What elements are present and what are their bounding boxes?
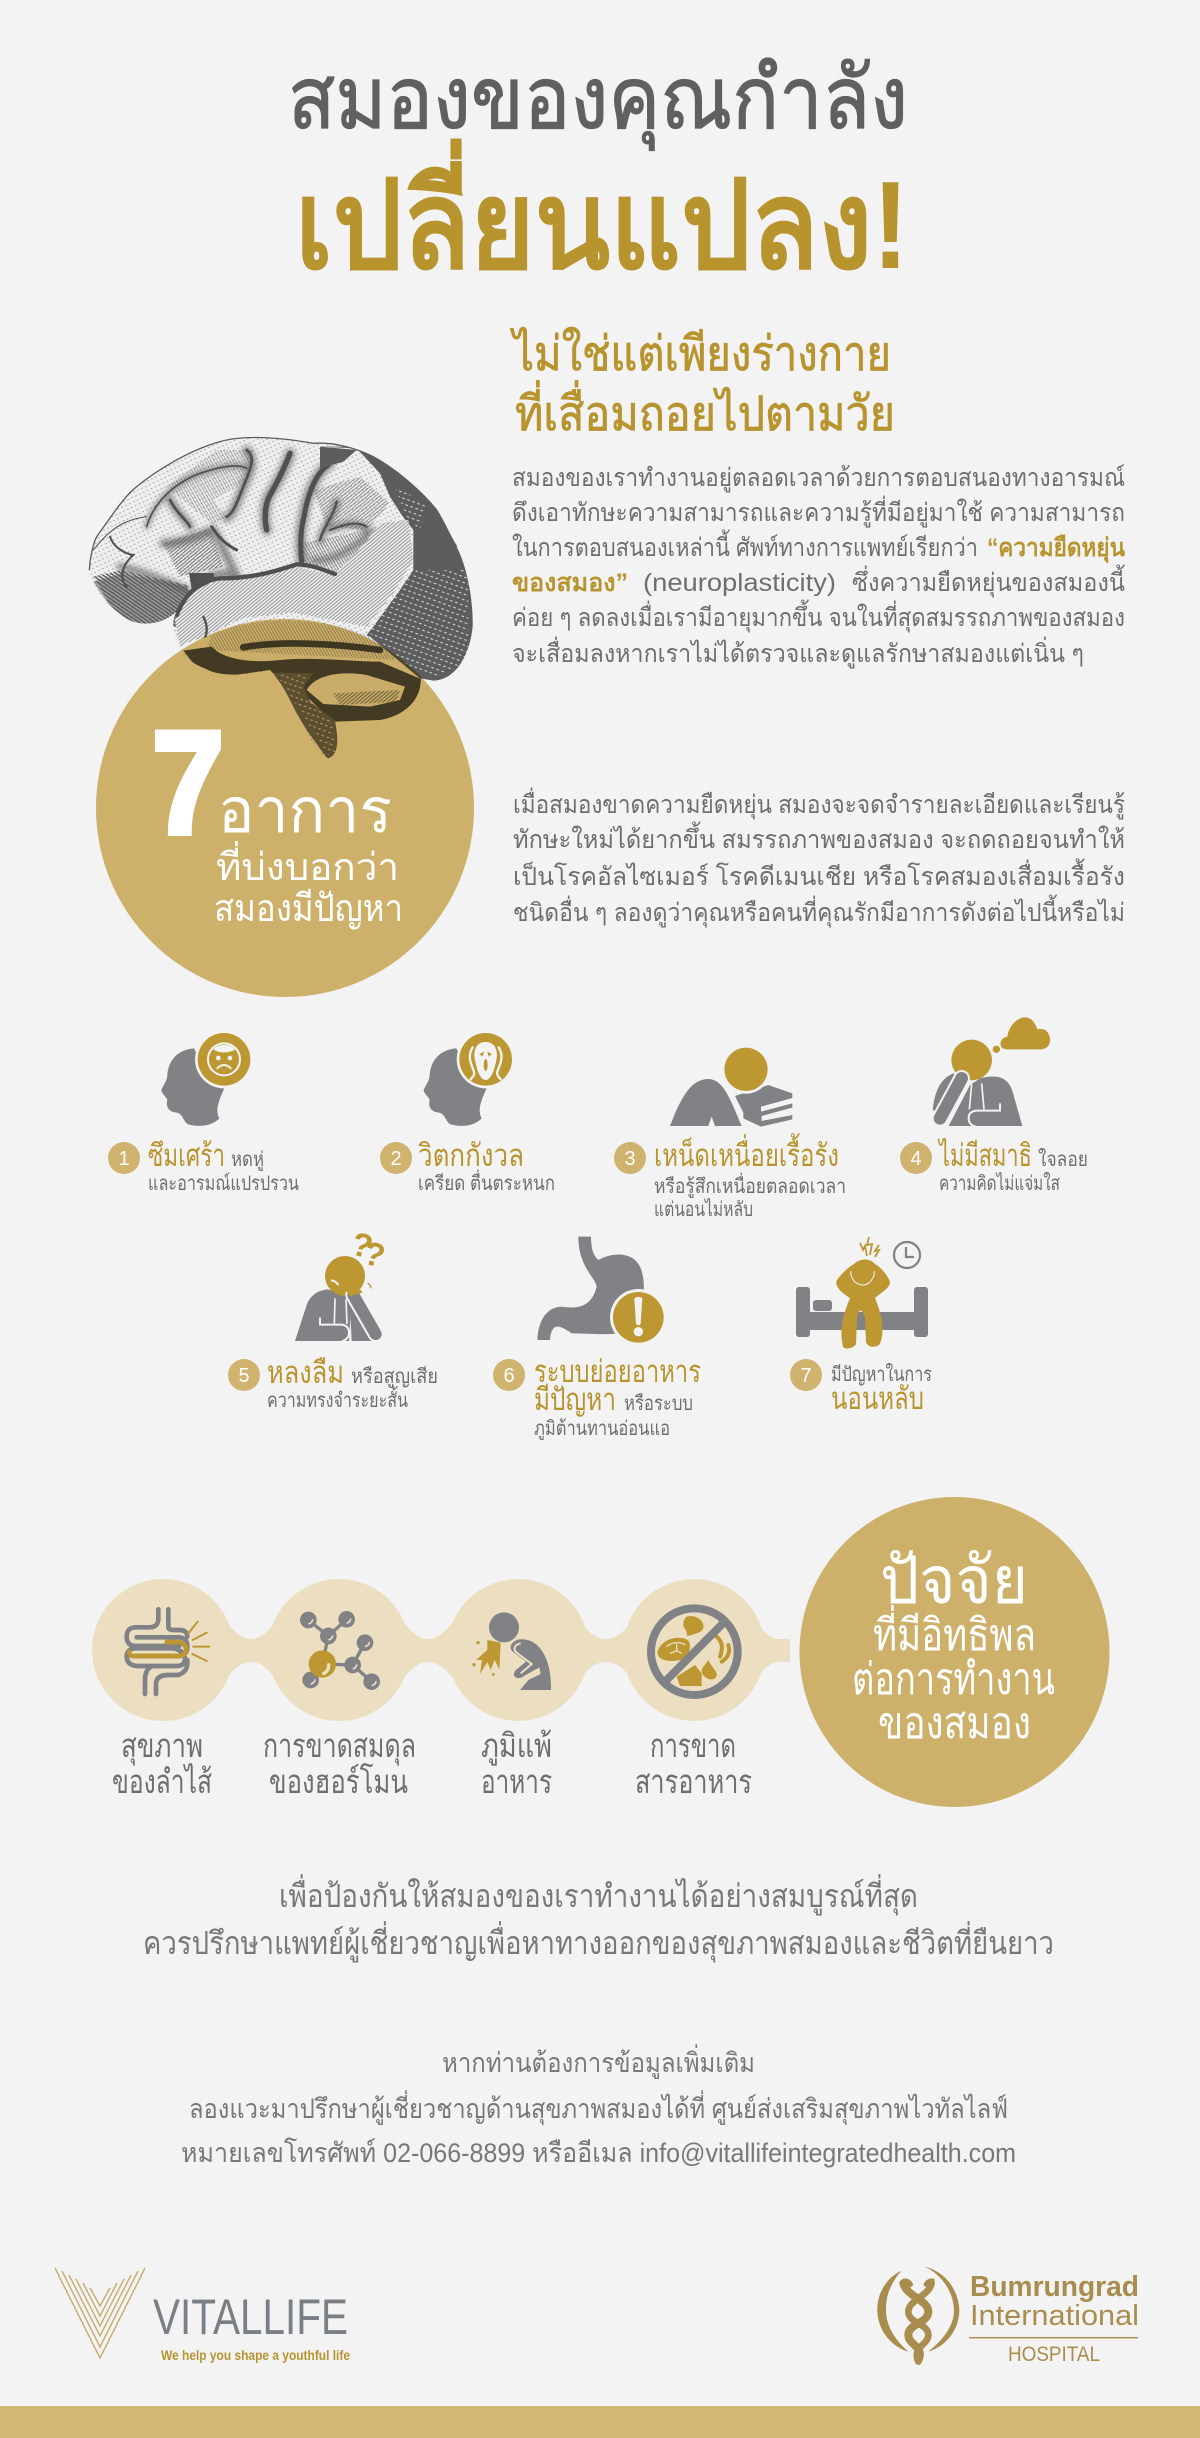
temporal underside and cerebellum (180, 621, 423, 760)
title (288, 51, 909, 295)
circle: factors headline: ต่อการทำงาน (852, 1655, 1055, 1704)
paragraph: neuroplasticity intro: ในการตอบสนองเหล่านี้ ศัพท์ทางการแพทย์เรียกว่า (512, 529, 978, 562)
icon 3: exhausted person on books (670, 1045, 792, 1127)
item 1: depression: 1 (118, 1148, 130, 1170)
icon: hormone imbalance molecule (300, 1611, 380, 1690)
logo: Bumrungrad International Hospital: International (970, 2300, 1139, 2332)
big numeral 7: 7 (152, 701, 224, 864)
badge text: symptoms (214, 777, 403, 930)
prevention message (143, 1874, 1054, 1963)
item 2: anxiety: เครียด ตื่นตระหนก (418, 1169, 555, 1195)
factor label 2 (263, 1727, 416, 1800)
paragraph: neuroplasticity intro: “ความยืดหยุ่น (987, 534, 1125, 564)
temporal lobe band (175, 520, 413, 647)
logo: Bumrungrad International Hospital: Bumrungrad (970, 2271, 1139, 2303)
contact information: ลองแวะมาปรึกษาผู้เชี่ยวชาญด้านสุขภาพสมองได้ที่ ศูนย์ส่งเสริมสุขภาพไวทัลไลฟ์ (189, 2090, 1008, 2126)
item 7: sleep problems: 7 (800, 1365, 812, 1387)
item 6: digestive problems: มีปัญหา (534, 1382, 616, 1417)
subheading: ไม่ใช่แต่เพียงร่างกาย (510, 326, 891, 381)
item 3: chronic fatigue: เหน็ดเหนื่อยเรื้อรัง (654, 1133, 839, 1173)
factor label 4: สารอาหาร (635, 1763, 752, 1800)
item 5: memory loss: หลงลืม (267, 1355, 344, 1390)
circle: factors headline: ของสมอง (878, 1699, 1031, 1748)
item 4: lack of focus: ไม่มีสมาธิ (937, 1138, 1032, 1173)
engraved brain illustration (80, 430, 480, 770)
dark rear of the brain (320, 447, 477, 687)
item 5: memory loss: หรือสูญเสีย (351, 1366, 438, 1389)
logo: Bumrungrad International Hospital (877, 2267, 1139, 2366)
item 3: chronic fatigue: 3 (624, 1148, 636, 1170)
icon: gut health (127, 1609, 209, 1694)
item 7: sleep problems: นอนหลับ (831, 1381, 924, 1416)
circle: 7 symptoms badge (96, 619, 474, 997)
factor label 2: การขาดสมดุล (263, 1727, 416, 1766)
factor label 4: การขาด (650, 1727, 736, 1764)
item 6: digestive problems (493, 1354, 701, 1441)
paragraph: neuroplasticity intro (512, 464, 1125, 669)
badge text: symptoms: อาการ (218, 777, 392, 846)
item 5: memory loss (228, 1355, 438, 1412)
item 2: anxiety (380, 1138, 555, 1195)
paragraph: neuroplasticity intro: ดึงเอาทักษะความสามารถและความรู้ที่มีอยู่มาใช้ ความสามารถ (512, 495, 1125, 528)
factor label 3: ภูมิแพ้ (481, 1727, 552, 1766)
icon 6: stomach with alert (537, 1237, 667, 1346)
factor label 3: อาหาร (481, 1763, 552, 1800)
frontal underside shading (93, 573, 193, 627)
factor blob chain (92, 1579, 790, 1721)
paragraph: neuroplasticity intro: สมองของเราทำงานอยู่ตลอดเวลาด้วยการตอบสนองทางอารมณ์ (512, 464, 1125, 493)
prevention message: ควรปรึกษาแพทย์ผู้เชี่ยวชาญเพื่อหาทางออกของสุขภาพสมองและชีวิตที่ยืนยาว (143, 1921, 1054, 1963)
item 3: chronic fatigue (614, 1133, 846, 1221)
item 6: digestive problems: 6 (503, 1365, 515, 1387)
paragraph: neuroplasticity intro: ซึ่งความยืดหยุ่นของสมองนี้ (852, 564, 1125, 598)
item 6: digestive problems: ระบบย่อยอาหาร (534, 1354, 701, 1389)
factor label 1: สุขภาพ (121, 1727, 203, 1766)
item 2: anxiety: วิตกกังวล (418, 1138, 524, 1173)
paragraph: loss of plasticity (513, 787, 1125, 928)
item 4: lack of focus: ความคิดไม่แจ่มใส (939, 1172, 1060, 1195)
item 1: depression: หดหู่ (231, 1149, 264, 1172)
item 7: sleep problems (790, 1359, 932, 1416)
icon 5: forgetful person with question marks (295, 1226, 389, 1341)
icon 1: depressed head (161, 1030, 253, 1126)
icon 5: forgetful person with question marks: ? (347, 1226, 377, 1267)
prevention message: เพื่อป้องกันให้สมองของเราทำงานได้อย่างสมบูรณ์ที่สุด (279, 1874, 918, 1916)
subheading: ที่เสื่อมถอยไปตามวัย (515, 380, 895, 441)
circle: factors headline (800, 1497, 1110, 1807)
item 1: depression: และอารมณ์แปรปรวน (148, 1172, 299, 1195)
item 1: depression (108, 1138, 299, 1195)
logo: Bumrungrad International Hospital: HOSPITAL (1008, 2343, 1100, 2366)
factor label 1: ของลำไส้ (112, 1763, 212, 1800)
item 1: depression: ซึมเศร้า (148, 1138, 225, 1173)
subheading (510, 326, 895, 441)
title: เปลี่ยนแปลง! (295, 138, 909, 295)
factor label 4 (635, 1727, 752, 1800)
paragraph: neuroplasticity intro: ค่อย ๆ ลดลงเมื่อเรามีอายุมากขึ้น จนในที่สุดสมรรถภาพของสมอง (512, 599, 1125, 633)
circle: factors headline: ปัจจัย (880, 1543, 1028, 1617)
item 6: digestive problems: ภูมิต้านทานอ่อนแอ (534, 1418, 670, 1441)
paragraph: neuroplasticity intro: (neuroplasticity) (643, 569, 836, 597)
item 5: memory loss: ความทรงจำระยะสั้น (267, 1386, 408, 1412)
paragraph: neuroplasticity intro: ของสมอง” (512, 569, 628, 597)
logo: Vitallife: We help you shape a youthful life (161, 2347, 350, 2363)
icon 5: forgetful person with question marks: ? (360, 1235, 389, 1276)
icon 2: anxious head (424, 1030, 515, 1126)
icon 7: person with insomnia on bed (796, 1237, 928, 1348)
item 3: chronic fatigue: หรือรู้สึกเหนื่อยตลอดเวลา (654, 1172, 846, 1199)
factor label 2: ของฮอร์โมน (269, 1763, 408, 1800)
badge text: symptoms: สมองมีปัญหา (214, 888, 403, 930)
item 6: digestive problems: หรือระบบ (624, 1393, 693, 1415)
factor label 3 (481, 1727, 552, 1800)
paragraph: neuroplasticity intro: จะเสื่อมลงหากเราไม่ได้ตรวจและดูแลรักษาสมองแต่เนิ่น ๆ (512, 636, 1084, 669)
bottom gold bar (0, 2406, 1200, 2438)
title: สมองของคุณกำลัง (288, 51, 908, 151)
circle: factors headline: ที่มีอิทธิพล (873, 1604, 1036, 1660)
item 4: lack of focus (900, 1138, 1088, 1195)
logo: Vitallife: VITALLIFE (153, 2289, 348, 2345)
item 2: anxiety: 2 (390, 1148, 402, 1170)
item 4: lack of focus: ใจลอย (1038, 1148, 1088, 1171)
contact information: หมายเลขโทรศัพท์ 02-066-8899 หรืออีเมล info@vitallifeintegratedhealth.com (181, 2137, 1016, 2168)
paragraph: loss of plasticity: ชนิดอื่น ๆ ลองดูว่าคุณหรือคนที่คุณรักมีอาการดังต่อไปนี้หรือไม่ (513, 894, 1125, 928)
badge text: symptoms: ที่บ่งบอกว่า (216, 841, 399, 889)
item 3: chronic fatigue: แต่นอนไม่หลับ (654, 1198, 753, 1221)
item 5: memory loss: 5 (238, 1365, 250, 1387)
paragraph: loss of plasticity: เมื่อสมองขาดความยืดหยุ่น สมองจะจดจำรายละเอียดและเรียนรู้ (513, 787, 1125, 820)
paragraph: loss of plasticity: เป็นโรคอัลไซเมอร์ โรคดีเมนเชีย หรือโรคสมองเสื่อมเรื้อรัง (513, 858, 1125, 891)
factor label 1 (112, 1727, 212, 1800)
contact information (181, 2044, 1016, 2168)
item 4: lack of focus: 4 (910, 1148, 922, 1170)
logo: Vitallife (55, 2268, 350, 2363)
icon 4: unfocused person with thought cloud (933, 1017, 1050, 1127)
item 7: sleep problems: มีปัญหาในการ (831, 1363, 932, 1386)
icon: food allergy (472, 1612, 551, 1690)
contact information: หากท่านต้องการข้อมูลเพิ่มเติม (442, 2044, 755, 2079)
paragraph: loss of plasticity: ทักษะใหม่ได้ยากขึ้น สมรรถภาพของสมอง จะถดถอยจนทำให้ (513, 821, 1125, 854)
icon: nutrient deficiency (651, 1608, 738, 1695)
